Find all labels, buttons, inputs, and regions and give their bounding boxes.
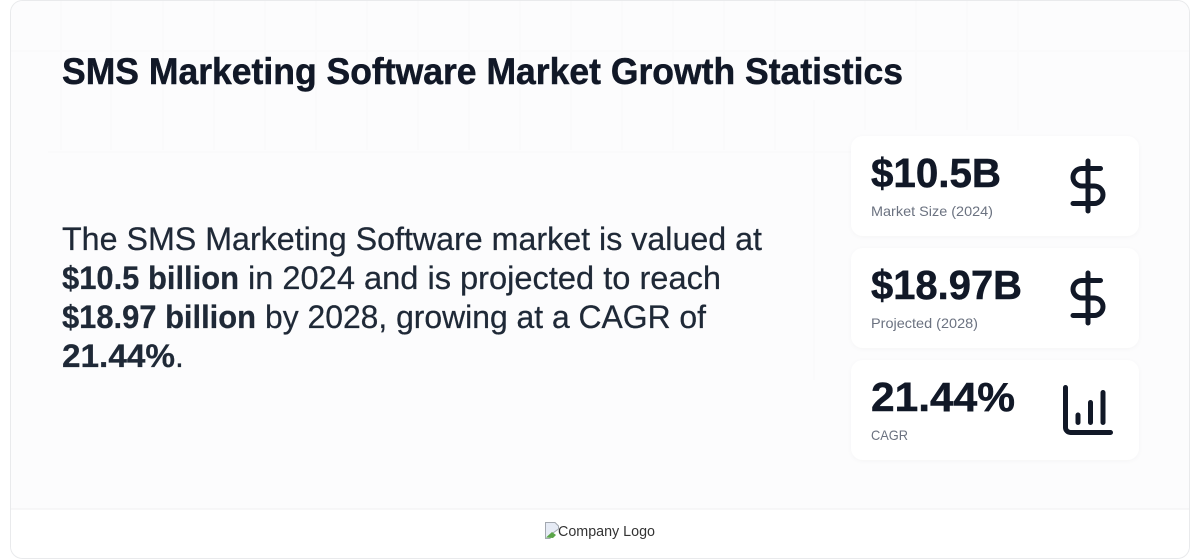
text block: market summary: [62, 221, 762, 374]
label: market size: Market Size (2024): [871, 203, 993, 219]
label: projected: Projected (2028): [871, 315, 978, 331]
text block: market summary: The SMS Marketing Software market is valued at: [62, 221, 762, 257]
footer: company logo: [546, 522, 655, 540]
text block: market summary: by 2028, growing at a CAGR of: [265, 299, 706, 335]
value: CAGR: 21.44%: [871, 374, 1015, 420]
label: CAGR: CAGR: [871, 427, 908, 443]
value: market size: $10.5B: [871, 150, 1001, 196]
icon: bar chart: [1066, 388, 1110, 432]
icon: dollar sign: [1073, 161, 1103, 211]
panel: projected card: [851, 248, 1139, 348]
icon: broken image: [546, 522, 558, 538]
text block: market summary: $10.5 billion: [62, 260, 239, 296]
panel: CAGR card: [851, 360, 1139, 460]
logo alt text: Company Logo: [558, 523, 655, 540]
title: SMS Marketing Software Market Growth Statistics: [62, 51, 903, 92]
text block: market summary: 21.44%: [62, 338, 175, 374]
text block: market summary: in 2024 and is projected to reach: [248, 260, 721, 296]
text block: market summary: .: [175, 338, 184, 374]
text block: market summary: $18.97 billion: [62, 299, 256, 335]
panel: market size card: [851, 136, 1139, 236]
icon: dollar sign: [1073, 273, 1103, 323]
value: projected: $18.97B: [871, 262, 1022, 308]
